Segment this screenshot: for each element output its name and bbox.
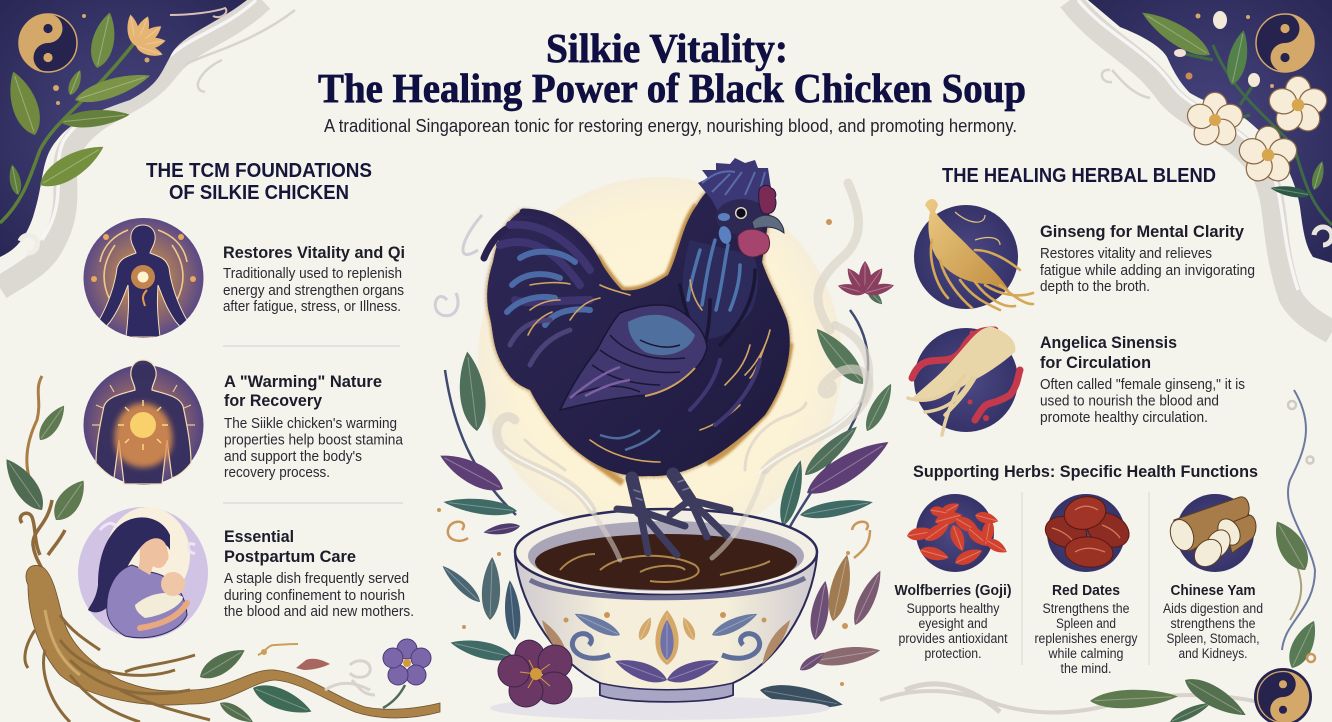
panel: TCM foundations bbox=[78, 160, 414, 639]
chicken bbox=[484, 158, 790, 555]
bowl pattern bbox=[542, 608, 790, 688]
label: red dates: while calming bbox=[1048, 646, 1124, 661]
text: warming nature: for Recovery bbox=[224, 391, 323, 410]
label: red dates: Spleen and bbox=[1056, 616, 1116, 631]
text: warming nature bbox=[224, 372, 404, 481]
text: postpartum care bbox=[224, 527, 414, 620]
text: ginseng: fatigue while adding an invigorating bbox=[1040, 263, 1255, 279]
soup swirls bbox=[560, 554, 770, 582]
heading: TCM foundations bbox=[146, 160, 372, 204]
text: ginseng: Restores vitality and relieves bbox=[1040, 246, 1212, 262]
label: goji: protection. bbox=[924, 646, 982, 661]
text: warming nature: properties help boost stamina bbox=[224, 432, 404, 448]
tail feathers bbox=[484, 212, 630, 365]
top-left corner panel bbox=[0, 0, 295, 288]
title bbox=[318, 25, 1026, 111]
label: chinese yam: and Kidneys. bbox=[1178, 646, 1248, 661]
label: chinese yam: Chinese Yam bbox=[1170, 583, 1256, 599]
bowl of soup bbox=[490, 509, 830, 720]
text: angelica: Angelica Sinensis bbox=[1040, 333, 1177, 352]
top-right corner panel bbox=[1070, 0, 1332, 332]
plant top right bbox=[1137, 4, 1332, 225]
text: postpartum care: during confinement to nourish bbox=[224, 588, 405, 604]
heading: supporting herbs: Supporting Herbs: Specific Health Functions bbox=[913, 462, 1258, 481]
label: goji: Supports healthy bbox=[906, 601, 1000, 616]
text: ginseng: Ginseng for Mental Clarity bbox=[1040, 222, 1245, 241]
text: restores vitality: energy and strengthen organs bbox=[223, 283, 404, 299]
label: chinese yam: Aids digestion and bbox=[1163, 601, 1263, 616]
text: angelica: promote healthy circulation. bbox=[1040, 410, 1208, 426]
chicken legs bbox=[617, 474, 730, 555]
text: angelica: Often called "female ginseng," it is bbox=[1040, 377, 1245, 393]
text: ginseng bbox=[1040, 222, 1255, 295]
text: ginseng: depth to the broth. bbox=[1040, 279, 1150, 295]
text: warming nature: and support the body's bbox=[224, 449, 362, 465]
label: goji: provides antioxidant bbox=[898, 631, 1008, 646]
text: warming nature: The Siikle chicken's warming bbox=[224, 416, 397, 432]
label: goji: eyesight and bbox=[918, 616, 988, 631]
heading: TCM foundations: THE TCM FOUNDATIONS bbox=[146, 160, 372, 182]
icon: chinese yam bbox=[1166, 494, 1256, 572]
root and vine bottom left bbox=[0, 376, 440, 722]
icon: angelica bbox=[908, 327, 1020, 435]
icon: warming body bbox=[84, 360, 204, 485]
label: goji bbox=[894, 583, 1012, 661]
label: red dates: Strengthens the bbox=[1042, 601, 1130, 616]
chicken wing bbox=[560, 305, 707, 450]
icon: yin yang top left bbox=[19, 14, 77, 72]
text: restores vitality: after fatigue, stress, or Illness. bbox=[223, 299, 401, 315]
text: angelica: for Circulation bbox=[1040, 353, 1151, 372]
icon: ginseng bbox=[914, 199, 1033, 310]
label: red dates bbox=[1034, 583, 1138, 676]
heading: TCM foundations: OF SILKIE CHICKEN bbox=[169, 182, 349, 204]
plant top left bbox=[0, 8, 226, 223]
text: angelica bbox=[1040, 333, 1245, 426]
title: The Healing Power of Black Chicken Soup bbox=[318, 65, 1026, 111]
text: postpartum care: A staple dish frequently served bbox=[224, 571, 409, 587]
icon: goji bbox=[906, 494, 1009, 572]
text: angelica: used to nourish the blood and bbox=[1040, 394, 1219, 410]
heading: herbal blend: THE HEALING HERBAL BLEND bbox=[942, 165, 1216, 187]
chicken neck feathers bbox=[590, 240, 770, 462]
label: red dates: replenishes energy bbox=[1034, 631, 1138, 646]
foliage around bowl bbox=[435, 215, 898, 714]
text: restores vitality bbox=[223, 243, 405, 315]
title: Silkie Vitality: bbox=[546, 25, 788, 71]
label: chinese yam: Spleen, Stomach, bbox=[1166, 631, 1260, 646]
text: restores vitality: Traditionally used to replenish bbox=[223, 266, 402, 282]
icon: yin yang top right bbox=[1256, 14, 1314, 72]
text: postpartum care: Postpartum Care bbox=[224, 547, 356, 566]
label: goji: Wolfberries (Goji) bbox=[894, 583, 1012, 599]
label: chinese yam bbox=[1163, 583, 1263, 661]
subtitle: A traditional Singaporean tonic for restoring energy, nourishing blood, and promoting hermony. bbox=[324, 116, 1017, 136]
label: red dates: Red Dates bbox=[1052, 583, 1120, 599]
icon: red dates bbox=[1042, 492, 1135, 572]
label: chinese yam: strengthens the bbox=[1170, 616, 1256, 631]
icon: purple flower bottom left bbox=[325, 639, 431, 708]
vine and yin yang bottom right bbox=[880, 390, 1323, 722]
label: red dates: the mind. bbox=[1060, 661, 1112, 676]
text: postpartum care: Essential bbox=[224, 527, 294, 546]
gold fur halo bbox=[543, 205, 790, 483]
panel: herbal blend bbox=[894, 165, 1263, 676]
text: warming nature: A "Warming" Nature bbox=[224, 372, 382, 391]
icon: vitality body bbox=[84, 218, 204, 338]
chicken crest and head bbox=[698, 158, 784, 257]
icon: mother and baby bbox=[78, 507, 208, 639]
sun glow behind chicken bbox=[478, 177, 842, 543]
purple flower at bowl base bbox=[498, 637, 572, 707]
steam left and right bbox=[497, 183, 869, 560]
text: postpartum care: the blood and aid new mothers. bbox=[224, 604, 414, 620]
text: restores vitality: Restores Vitality and Qi bbox=[223, 243, 405, 262]
text: warming nature: recovery process. bbox=[224, 465, 330, 481]
